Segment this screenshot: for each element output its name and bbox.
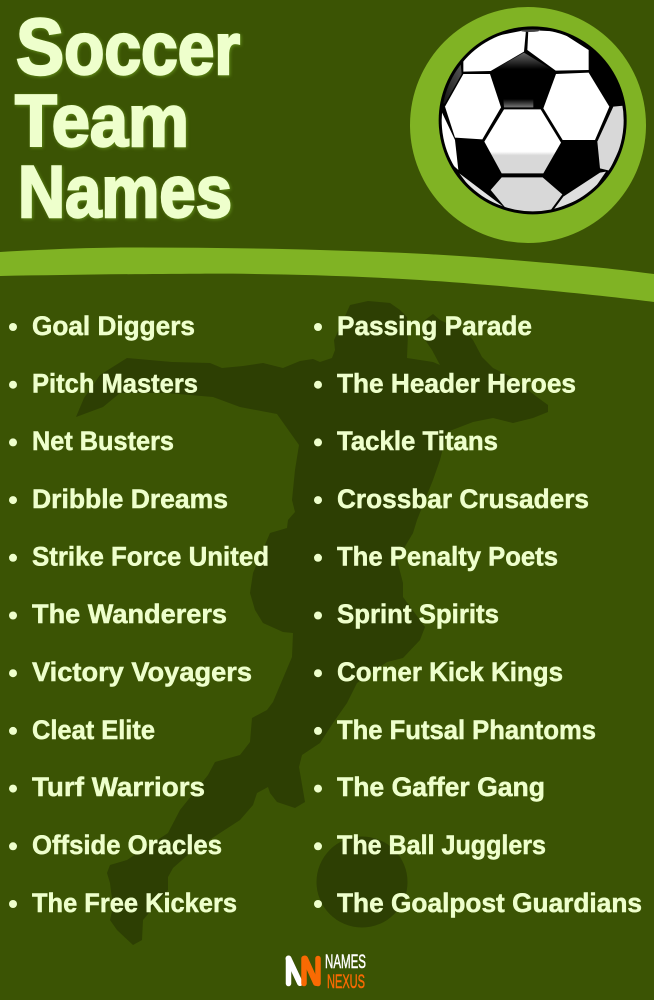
right names list: Corner Kick Kings	[337, 657, 563, 687]
right names list: Passing Parade	[337, 311, 532, 341]
right names list: The Futsal Phantoms	[337, 715, 596, 745]
right names list: The Header Heroes	[337, 368, 576, 398]
curved band	[0, 248, 654, 302]
right names list: Sprint Spirits	[337, 599, 499, 629]
right names list	[314, 311, 642, 918]
left names list: The Wanderers	[32, 599, 227, 629]
right names list: The Gaffer Gang	[337, 772, 545, 802]
right names list: The Penalty Poets	[337, 542, 558, 572]
left names list: Turf Warriors	[32, 772, 205, 802]
right names list: Tackle Titans	[337, 426, 498, 456]
right names list: Crossbar Crusaders	[337, 484, 589, 514]
logo: Names Nexus: NAMES	[325, 952, 366, 973]
title: Soccer	[16, 2, 240, 91]
right names list: The Ball Jugglers	[337, 830, 546, 860]
logo: Names Nexus	[288, 952, 366, 993]
left names list: The Free Kickers	[32, 888, 237, 918]
left names list: Net Busters	[32, 426, 174, 456]
title	[15, 2, 240, 233]
logo: Names Nexus: NEXUS	[327, 972, 365, 993]
title: Team	[15, 81, 189, 162]
left names list: Pitch Masters	[32, 368, 198, 398]
title: Names	[18, 152, 232, 233]
left names list: Goal Diggers	[32, 311, 195, 341]
left names list: Cleat Elite	[32, 715, 155, 745]
left names list: Offside Oracles	[32, 830, 222, 860]
player silhouette	[76, 301, 548, 945]
left names list: Strike Force United	[32, 542, 269, 572]
right names list: The Goalpost Guardians	[337, 888, 642, 918]
silhouette ball	[316, 836, 408, 928]
icon: soccer ball in ring	[410, 7, 646, 243]
left names list: Dribble Dreams	[32, 484, 228, 514]
left names list	[9, 311, 269, 918]
left names list: Victory Voyagers	[32, 657, 252, 687]
